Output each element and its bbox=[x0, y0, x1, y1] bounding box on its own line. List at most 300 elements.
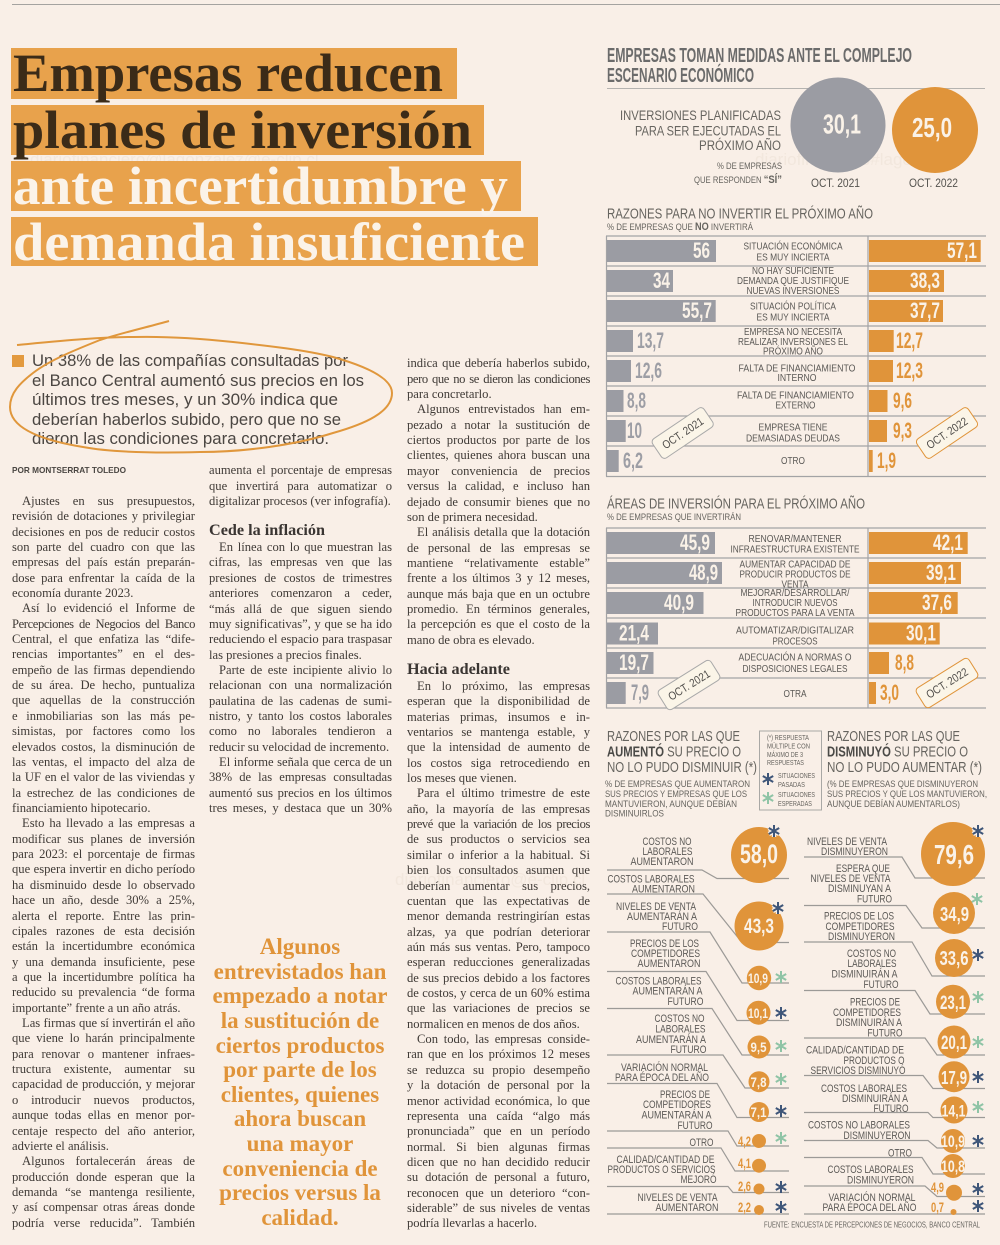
labels: DISMINUIRÁN A bbox=[842, 1092, 909, 1105]
row labels: RENOVAR/MANTENER bbox=[748, 533, 842, 545]
legend: MÁXIMO DE 3 bbox=[767, 750, 803, 759]
row labels: PRODUCTOS PARA LA VENTA bbox=[736, 607, 854, 619]
labels bbox=[806, 836, 917, 1214]
body text: column 3: Con todo, las empresas conside- bbox=[417, 1032, 590, 1046]
panel: investment areas bbox=[606, 496, 986, 711]
body text: column 1: importante” frente a un año atrás. bbox=[12, 1001, 181, 1015]
body text: column 3: prevé que la variación de los precios bbox=[407, 817, 590, 831]
body text: column 1: financiamiento hipotecario. bbox=[12, 801, 150, 815]
body text: column 1: o introducir nuevos productos, bbox=[12, 1093, 195, 1107]
text: diariofinanciero@e-clip.cl bbox=[395, 870, 585, 889]
stamp: Oct. 2022: OCT. 2022 bbox=[925, 416, 970, 452]
bubbles: 2,6 bbox=[738, 1178, 751, 1194]
bars: Oct. 2022: 38,3 bbox=[910, 268, 940, 293]
panel: planned investments bbox=[620, 78, 978, 190]
row labels: DISPOSICIONES LEGALES bbox=[742, 663, 848, 675]
labels bbox=[608, 836, 719, 1214]
pull quote: precios versus la bbox=[219, 1180, 381, 1205]
labels: FUTURO bbox=[662, 921, 698, 933]
bars: Oct. 2021: 48,9 bbox=[689, 560, 718, 585]
labels: VARIACIÓN NORMAL bbox=[621, 1061, 708, 1074]
body text: column 1: tructura existente, aumentar su bbox=[12, 1062, 195, 1076]
heading: reasons price fell bbox=[827, 728, 987, 810]
lead paragraph with hand-drawn ellipse: últimos tres meses, y un 30% indica que bbox=[32, 390, 338, 409]
labels: COSTOS LABORALES bbox=[821, 1083, 907, 1095]
labels: ESPERA QUE bbox=[836, 863, 890, 875]
row labels: DEMANDA QUE JUSTIFIQUE bbox=[737, 275, 849, 287]
labels: FUTURO bbox=[868, 1028, 903, 1040]
panel: planned investments: PARA SER EJECUTADAS EL bbox=[635, 124, 781, 138]
labels: AUMENTARON bbox=[638, 958, 701, 970]
row labels: INTERNO bbox=[778, 372, 816, 384]
body text: column 3: indica que debería haberlos subido, bbox=[407, 356, 590, 370]
body text: column 1: que aquellas de la construcción bbox=[12, 693, 195, 707]
body text: column 3: siderable” de sus niveles de ventas bbox=[407, 1201, 590, 1215]
body text: column 1: y una demanda insuficiente, pese bbox=[12, 955, 195, 969]
body text: column 2: reducir su velocidad de incremento. bbox=[209, 740, 389, 754]
panel: reasons not to invest bbox=[606, 206, 986, 476]
body text: column 1: a que la incertidumbre política ha bbox=[12, 970, 195, 984]
title: Empresas reducen bbox=[13, 43, 443, 103]
body text: column 3: ciertos productos por parte de los bbox=[407, 433, 590, 447]
lead paragraph with hand-drawn ellipse: dieron las condiciones para concretarlo. bbox=[32, 429, 329, 448]
bubbles: 10,9 bbox=[941, 1132, 965, 1151]
bubbles: 4,1 bbox=[738, 1155, 751, 1171]
title bbox=[11, 43, 538, 272]
body text: column 1: para renovar o mantener infraes- bbox=[12, 1047, 195, 1061]
body text: column 2: reduciendo el espacio para traspasar bbox=[209, 632, 392, 646]
heading: reasons price rose: NO LO PUDO DISMINUIR (*) bbox=[607, 759, 757, 776]
legend: ESPERADAS bbox=[778, 799, 812, 808]
panel: planned investments: 25,0 bbox=[912, 112, 952, 143]
pull quote: empezado a notar bbox=[212, 983, 388, 1008]
body text: column 2: Cede la inflación bbox=[209, 521, 325, 539]
body text: column 3: los meses que vienen. bbox=[407, 771, 517, 785]
heading: reasons price rose bbox=[605, 728, 757, 820]
body text: column 3: normal. Si bien algunas firmas bbox=[407, 1140, 590, 1154]
body text: column 3: y la dotación de personal por la bbox=[407, 1078, 590, 1092]
body text: column 1: simistas, por factores como los bbox=[12, 724, 195, 738]
bars: Oct. 2021: 6,2 bbox=[623, 448, 643, 473]
bubbles: 7,1 bbox=[750, 1104, 767, 1120]
labels: PRECIOS DE bbox=[850, 996, 900, 1008]
row labels: AUTOMATIZAR/DIGITALIZAR bbox=[736, 624, 854, 636]
bubbles: 43,3 bbox=[744, 915, 774, 938]
bars: Oct. 2021 bbox=[607, 530, 722, 705]
body text: column 1: rencias importantes” en el des- bbox=[12, 647, 195, 661]
labels: AUMENTARÁN A bbox=[632, 984, 703, 998]
bars: Oct. 2022 bbox=[869, 238, 981, 473]
labels: COMPETIDORES bbox=[826, 921, 894, 933]
labels: COSTOS NO LABORALES bbox=[808, 1120, 910, 1132]
bubbles: 34,9 bbox=[940, 904, 969, 926]
legend: MÚLTIPLE CON bbox=[767, 742, 810, 750]
body text: column 1: modificar sus planes de inversión bbox=[12, 832, 195, 846]
body text: column 3: de personal de las empresas se bbox=[407, 541, 590, 555]
bubbles: 23,1 bbox=[940, 993, 966, 1014]
body text: column 3: pero que no se dieron las condiciones bbox=[407, 372, 590, 386]
labels: DISMINUYERON bbox=[828, 931, 895, 943]
labels: COSTOS NO bbox=[847, 948, 896, 960]
bars: Oct. 2021: 21,4 bbox=[619, 620, 650, 646]
labels: COMPETIDORES bbox=[643, 1099, 711, 1111]
title: demanda insuficiente bbox=[13, 212, 525, 272]
body text: column 2: cifras, las empresas ven que las bbox=[209, 555, 392, 569]
labels: AUMENTARÁN A bbox=[642, 1108, 712, 1122]
labels: NIVELES DE VENTA bbox=[810, 873, 891, 885]
panel: investment areas: ÁREAS DE INVERSIÓN PARA EL PRÓXIMO AÑO bbox=[607, 496, 865, 512]
situation markers bbox=[769, 825, 786, 1213]
body text: column 1: la UF en el valor de las viviendas y bbox=[12, 770, 195, 784]
body text: column 1: capacidad de producción, y mejorar bbox=[12, 1077, 195, 1091]
panel: reasons not to invest: % DE EMPRESAS QUE NO INVERTIRÁ bbox=[607, 221, 754, 233]
body text: column 2: muy significativas”, y que se ha ido bbox=[209, 617, 392, 631]
body text: column 3: El análisis detalla que la dotación bbox=[417, 525, 590, 539]
labels: OTRO bbox=[690, 1137, 714, 1149]
labels: PRECIOS DE bbox=[660, 1089, 710, 1101]
panel: planned investments: INVERSIONES PLANIFICADAS bbox=[620, 108, 781, 123]
row labels: REALIZAR INVERSIONES EL bbox=[738, 336, 848, 348]
labels: VARIACIÓN NORMAL bbox=[828, 1191, 916, 1204]
body text: column 3: de sus precios debido a los factores bbox=[407, 971, 590, 985]
body text: column 1: Percepciones de Negocios del Banco bbox=[12, 617, 195, 631]
stamp: Oct. 2022: OCT. 2022 bbox=[924, 666, 971, 701]
labels: PRODUCTOS O bbox=[844, 1055, 905, 1067]
labels: DISMINUYERON bbox=[847, 1174, 914, 1186]
labels: CALIDAD/CANTIDAD DE bbox=[616, 1154, 714, 1166]
legend: PASADAS bbox=[778, 780, 805, 789]
pull quote: la sustitución de bbox=[221, 1008, 379, 1033]
infographic heading: ESCENARIO ECONÓMICO bbox=[607, 63, 754, 87]
body text: column 3: ran que en los próximos 12 meses bbox=[407, 1047, 590, 1061]
labels: DISMINUYAN A bbox=[828, 883, 892, 895]
body text: column 1: reducido su prevalencia “de forma bbox=[12, 985, 195, 999]
labels: COMPETIDORES bbox=[833, 1007, 901, 1019]
pull quote: una mayor bbox=[247, 1131, 353, 1156]
body text: column 3: Para el último trimestre de este bbox=[417, 786, 590, 800]
panel: planned investments: OCT. 2022 bbox=[909, 176, 958, 190]
row labels: FALTA DE FINANCIAMIENTO bbox=[738, 362, 856, 374]
legend: (*) RESPUESTA bbox=[767, 733, 809, 742]
bubble chart: price increases bbox=[607, 825, 789, 1215]
labels: PARA ÉPOCA DEL AÑO bbox=[822, 1201, 917, 1214]
pull quote: por parte de los bbox=[223, 1057, 377, 1082]
body text: column 1: podría verse reducida”. También bbox=[12, 1216, 195, 1230]
row labels: NUEVAS INVERSIONES bbox=[746, 285, 840, 297]
row labels: EMPRESA TIENE bbox=[758, 422, 828, 434]
stamp: Oct. 2021: OCT. 2021 bbox=[666, 668, 713, 703]
labels: AUMENTARON bbox=[656, 1202, 719, 1214]
body text: column 1 bbox=[12, 494, 195, 1230]
body text: column 3: promedio. En términos generales, bbox=[407, 602, 590, 616]
body text: column 3: de sus productos o servicios sea bbox=[407, 832, 590, 846]
body text: column 3: podría llevarlas a hacerlo. bbox=[407, 1216, 537, 1230]
body text: column 1: que viene lo harán principalmente bbox=[12, 1031, 195, 1045]
bars: Oct. 2021: 12,6 bbox=[635, 358, 662, 383]
bars: Oct. 2022: 3,0 bbox=[880, 680, 899, 705]
labels: AUMENTARÁN A bbox=[636, 1033, 707, 1046]
bars: Oct. 2021: 10 bbox=[627, 418, 642, 443]
body text: column 1: ha disminuido desde lo observado bbox=[12, 878, 195, 892]
body text: column 3: son de primera necesidad. bbox=[407, 510, 538, 524]
body text: column 3: bien los consultados asumen que bbox=[407, 863, 590, 877]
body text: column 3: menor demanda restringirían estas bbox=[407, 909, 590, 923]
body text: column 2: nistro, y tanto los costos laborales bbox=[209, 709, 392, 723]
row labels: MEJORAR/DESARROLLAR/ bbox=[740, 587, 850, 599]
body text: column 1: revisión de dotaciones y privilegiar bbox=[12, 509, 195, 523]
labels: PRODUCTOS O SERVICIOS bbox=[608, 1164, 716, 1176]
panel: planned investments: OCT. 2021 bbox=[811, 176, 860, 190]
heading: reasons price rose: % DE EMPRESAS QUE AUMENTARON bbox=[605, 779, 750, 790]
row labels: OTRO bbox=[781, 455, 805, 467]
infographic heading bbox=[607, 44, 985, 89]
legend: SITUACIONES bbox=[778, 790, 815, 799]
legend: SITUACIONES bbox=[778, 771, 815, 780]
body text: column 1: y así compensar otras áreas donde bbox=[12, 1200, 195, 1214]
body text: column 1: que espera invertir en dicho período bbox=[12, 862, 195, 876]
body text: column 1: dose para enfrentar la caída de la bbox=[12, 571, 195, 585]
bars: Oct. 2021: 8,8 bbox=[627, 388, 646, 413]
title: ante incertidumbre y bbox=[13, 156, 508, 216]
bars: Oct. 2022: 57,1 bbox=[947, 238, 977, 263]
body text: column 3: pronunciada” que en un período bbox=[407, 1124, 590, 1138]
labels: NIVELES DE VENTA bbox=[807, 836, 888, 848]
body text: column 3: ventarios se mantenga estable, y bbox=[407, 725, 590, 739]
labels: LABORALES bbox=[656, 1024, 706, 1036]
body text: column 3: año, la mayoría de las empresas bbox=[407, 802, 590, 816]
body text: column 2: digitalizar procesos (ver infografía). bbox=[209, 494, 391, 508]
body text: column 3: de costos, y cerca de un 60% estima bbox=[407, 986, 590, 1000]
bars: Oct. 2022: 30,1 bbox=[906, 620, 936, 646]
labels: COSTOS NO bbox=[642, 836, 692, 848]
labels: DISMINUIRÁN A bbox=[832, 968, 898, 980]
pull quote bbox=[212, 934, 388, 1230]
labels: AUMENTARÁN A bbox=[627, 910, 698, 923]
body text: column 1: Así lo evidenció el Informe de bbox=[22, 601, 195, 615]
labels: FUTURO bbox=[670, 1044, 707, 1056]
body text: column 1: para 2023: el porcentaje de firmas bbox=[12, 847, 195, 861]
body text: column 3: mayor conveniencia de precios bbox=[407, 464, 590, 478]
body text: column 3: reconocen que un deterioro “con- bbox=[407, 1186, 590, 1200]
labels: NIVELES DE VENTA bbox=[616, 901, 697, 913]
body text: column 1: Las firmas que sí invertirán el año bbox=[22, 1016, 195, 1030]
body text: column 2 bbox=[209, 463, 392, 815]
bars: Oct. 2022: 39,1 bbox=[926, 560, 956, 585]
labels: PRECIOS DE LOS bbox=[824, 910, 894, 922]
body text: column 1: están la incertidumbre económica bbox=[12, 939, 195, 953]
labels: FUTURO bbox=[857, 894, 892, 906]
body text: column 2: En línea con lo que muestran las bbox=[219, 540, 392, 554]
bars: Oct. 2021: 45,9 bbox=[680, 530, 710, 555]
body text: column 2: las presiones a precios finales. bbox=[209, 648, 362, 662]
body text: column 3: aunque más baja que en un octubre bbox=[407, 587, 590, 601]
row labels: AUMENTAR CAPACIDAD DE bbox=[740, 558, 850, 570]
row labels: DEMASIADAS DEUDAS bbox=[746, 432, 840, 444]
body text: column 3: se reduzca su propio desempeño bbox=[407, 1063, 590, 1077]
labels: SERVICIOS DISMINUYÓ bbox=[810, 1064, 906, 1077]
body text: column 1: economía durante 2023. bbox=[12, 586, 133, 600]
heading: reasons price rose: SUS PRECIOS Y EMPRESAS QUE LOS bbox=[605, 789, 747, 800]
body text: column 2: paulatina de las cadenas de sumi- bbox=[209, 694, 392, 708]
labels: AUMENTARON bbox=[630, 856, 694, 868]
body text: column 1: decisiones en pos de reducir costos bbox=[12, 525, 195, 539]
body text: column 2: que invertirá para automatizar o bbox=[209, 479, 392, 493]
row labels: SITUACIÓN POLÍTICA bbox=[750, 300, 836, 312]
panel: reasons not to invest: RAZONES PARA NO INVERTIR EL PRÓXIMO AÑO bbox=[607, 206, 873, 222]
labels: COSTOS LABORALES bbox=[616, 976, 702, 988]
bars: Oct. 2022: 8,8 bbox=[895, 650, 914, 675]
pull quote: entrevistados han bbox=[214, 959, 387, 984]
panel: planned investments: PRÓXIMO AÑO bbox=[699, 138, 781, 153]
body text: column 3: Algunos entrevistados han em- bbox=[417, 402, 590, 416]
labels: FUTURO bbox=[874, 1103, 909, 1115]
body text: column 3: deberían aumentar sus precios, bbox=[407, 879, 590, 893]
bubbles: 14,1 bbox=[942, 1102, 966, 1120]
body text: column 1: centaje respecto del año anterior, bbox=[12, 1124, 195, 1138]
bars: Oct. 2022: 12,7 bbox=[896, 328, 923, 353]
body text: column 1: la estrechez de las condiciones de bbox=[12, 786, 195, 800]
row labels: OTRA bbox=[784, 688, 806, 700]
body text: column 2: “más allá de que siguen siendo bbox=[209, 602, 392, 616]
heading: reasons price rose: RAZONES POR LAS QUE bbox=[607, 728, 740, 745]
bars: Oct. 2022: 37,6 bbox=[922, 590, 952, 615]
pull quote: Algunos bbox=[260, 934, 340, 959]
pull quote: clientes, quienes bbox=[221, 1082, 379, 1107]
body text: column 2: tres meses, y destaca que un 30% bbox=[209, 801, 392, 815]
panel: planned investments: 30,1 bbox=[823, 108, 861, 140]
heading: reasons price rose: DISMINUIRLOS bbox=[605, 808, 664, 820]
body text: column 1: Algunos fortalecerán áreas de bbox=[22, 1154, 195, 1168]
stamp: Oct. 2021: OCT. 2021 bbox=[660, 416, 706, 452]
labels: PRECIOS DE LOS bbox=[630, 938, 699, 950]
title: planes de inversión bbox=[13, 100, 472, 160]
row labels: VENTA bbox=[782, 578, 808, 590]
body text: column 3: En lo próximo, las empresas bbox=[417, 679, 590, 693]
heading: reasons price fell: DISMINUYÓ SU PRECIO O bbox=[827, 742, 968, 760]
body text: column 1: alerta el reporte. Entre las prin- bbox=[12, 908, 195, 922]
body text: column 1: empeño de las firmas dependiendo bbox=[12, 663, 195, 677]
bubbles: 79,6 bbox=[934, 839, 974, 870]
heading: reasons price rose: AUMENTÓ SU PRECIO O bbox=[607, 742, 741, 760]
lead paragraph with hand-drawn ellipse: deberían haberlos subido, pero que no se bbox=[32, 410, 341, 429]
bubble chart: price decreases bbox=[804, 822, 985, 1215]
bars: Oct. 2021 bbox=[607, 238, 716, 473]
row labels bbox=[730, 533, 860, 700]
body text: column 3: esperan que la disponibilidad de bbox=[407, 694, 590, 708]
pull quote: ahora buscan bbox=[234, 1106, 366, 1131]
body text: column 1: e inmobiliarias son las más pe- bbox=[12, 709, 195, 723]
body text: column 2: 38% de las empresas consultadas bbox=[209, 770, 392, 784]
body text: column 3: mano de obra es elevado. bbox=[407, 633, 535, 647]
body text: column 2: El informe señala que cerca de un bbox=[219, 755, 392, 769]
lead paragraph with hand-drawn ellipse bbox=[10, 321, 392, 452]
labels: FUTURO bbox=[668, 996, 704, 1008]
labels: COSTOS LABORALES bbox=[828, 1164, 914, 1176]
body text: column 1: elevados costos, la disminución de bbox=[12, 740, 195, 754]
body text: column 3: los costos siga retrocediendo en bbox=[407, 756, 590, 770]
bars: Oct. 2021: 40,9 bbox=[664, 590, 694, 615]
row labels: PROCESOS bbox=[772, 636, 818, 648]
bars: Oct. 2022: 9,3 bbox=[893, 418, 912, 443]
row labels: NO HAY SUFICIENTE bbox=[752, 265, 834, 277]
body text: column 2: Parte de este incipiente alivio lo bbox=[219, 663, 392, 677]
body text: column 3: clientes, quienes ahora buscan una bbox=[407, 448, 590, 462]
body text: column 3: frente a los últimos 3 y 12 meses, bbox=[407, 571, 590, 585]
body text: column 3: dejado de consumir bienes que no bbox=[407, 495, 590, 509]
bars: Oct. 2022: 1,9 bbox=[877, 448, 896, 473]
labels: PARA ÉPOCA DEL AÑO bbox=[615, 1071, 709, 1084]
bars: Oct. 2022: 9,6 bbox=[893, 388, 912, 413]
body text: column 3: similar o inferior a la habitual. Si bbox=[407, 848, 590, 862]
legend bbox=[760, 731, 822, 810]
body text: column 1: son parte del cuadro con que las bbox=[12, 540, 195, 554]
labels: OTRO bbox=[888, 1148, 912, 1160]
body text: column 1: aunque todas ellas en menor por- bbox=[12, 1108, 195, 1122]
body text: column 2: presiones de costos de trimestres bbox=[209, 571, 392, 585]
labels: LABORALES bbox=[848, 958, 896, 970]
bubbles: 17,9 bbox=[941, 1068, 967, 1088]
row labels: INTRODUCIR NUEVOS bbox=[752, 597, 838, 609]
bubbles: 10,8 bbox=[941, 1157, 965, 1176]
body text: column 3: versus la calidad, e incluso han bbox=[407, 479, 590, 493]
labels: DISMINUYERON bbox=[821, 846, 888, 858]
body text: column 3: la percepción es que el costo de la bbox=[407, 617, 590, 631]
lead paragraph with hand-drawn ellipse: el Banco Central aumentó sus precios en los bbox=[32, 371, 364, 390]
labels: LABORALES bbox=[642, 846, 692, 858]
body text: column 3: pezado a notar la sustitución de bbox=[407, 418, 590, 432]
body text: column 1: Esto ha llevado a las empresas a bbox=[22, 816, 195, 830]
stamp: Oct. 2021 bbox=[657, 659, 721, 711]
row labels: PRÓXIMO AÑO bbox=[763, 344, 823, 358]
bars: Oct. 2021: 19,7 bbox=[619, 650, 649, 675]
body text: column 1: las ventas, el impacto del alza de bbox=[12, 755, 195, 769]
body text: column 2: como no laborales tendieron a bbox=[209, 724, 392, 738]
body text: column 2: aumentó sus precios en los últimos bbox=[209, 786, 392, 800]
body text: column 2: aumenta el porcentaje de empresas bbox=[209, 463, 392, 477]
pull quote: calidad. bbox=[261, 1205, 339, 1230]
bubbles: 33,6 bbox=[940, 948, 968, 970]
panel: planned investments: % DE EMPRESAS bbox=[717, 161, 782, 171]
row labels: FALTA DE FINANCIAMIENTO bbox=[737, 390, 854, 402]
bars: Oct. 2022 bbox=[869, 530, 968, 705]
body text: column 3: Hacia adelante bbox=[407, 660, 510, 678]
bubbles: 4,2 bbox=[738, 1133, 751, 1149]
pull quote: conveniencia de bbox=[222, 1156, 378, 1181]
body text: column 3: para concretarlo. bbox=[407, 387, 492, 401]
labels: COSTOS NO bbox=[654, 1013, 705, 1025]
labels: DISMINUIRÁN A bbox=[836, 1016, 903, 1029]
bubbles: 10,9 bbox=[748, 970, 768, 986]
body text: column 3: alzas, ya que podrían deteriorar bbox=[407, 925, 590, 939]
bubbles: 7,8 bbox=[750, 1074, 767, 1090]
body text: column 1: demanda “se mantenga resiliente, bbox=[12, 1185, 195, 1199]
row labels: ADECUACIÓN A NORMAS O bbox=[738, 650, 852, 664]
body text: column 3: mantiene “relativamente estable” bbox=[407, 556, 590, 570]
row labels: INFRAESTRUCTURA EXISTENTE bbox=[730, 544, 860, 556]
body text: column 1: hace un año, desde 30% a 25%, bbox=[12, 893, 195, 907]
body text: column 3: su dotación de personal a futuro, bbox=[407, 1170, 590, 1184]
stamp: Oct. 2022 bbox=[915, 657, 979, 709]
body text: column 1: de su área. De hecho, puntualiza bbox=[12, 678, 195, 692]
row labels: ES MUY INCIERTA bbox=[756, 252, 830, 264]
stamp: Oct. 2022 bbox=[915, 406, 979, 460]
bubbles: 20,1 bbox=[941, 1033, 967, 1054]
body text: column 3: esperan reducciones generalizadas bbox=[407, 955, 590, 969]
byline: POR MONTSERRAT TOLEDO bbox=[12, 465, 126, 475]
body text: column 3: aún más sus ventas. Pero, tampoco bbox=[407, 940, 590, 954]
body text: column 2: relacionan con una normalización bbox=[209, 678, 392, 692]
bubbles: 58,0 bbox=[740, 839, 778, 869]
